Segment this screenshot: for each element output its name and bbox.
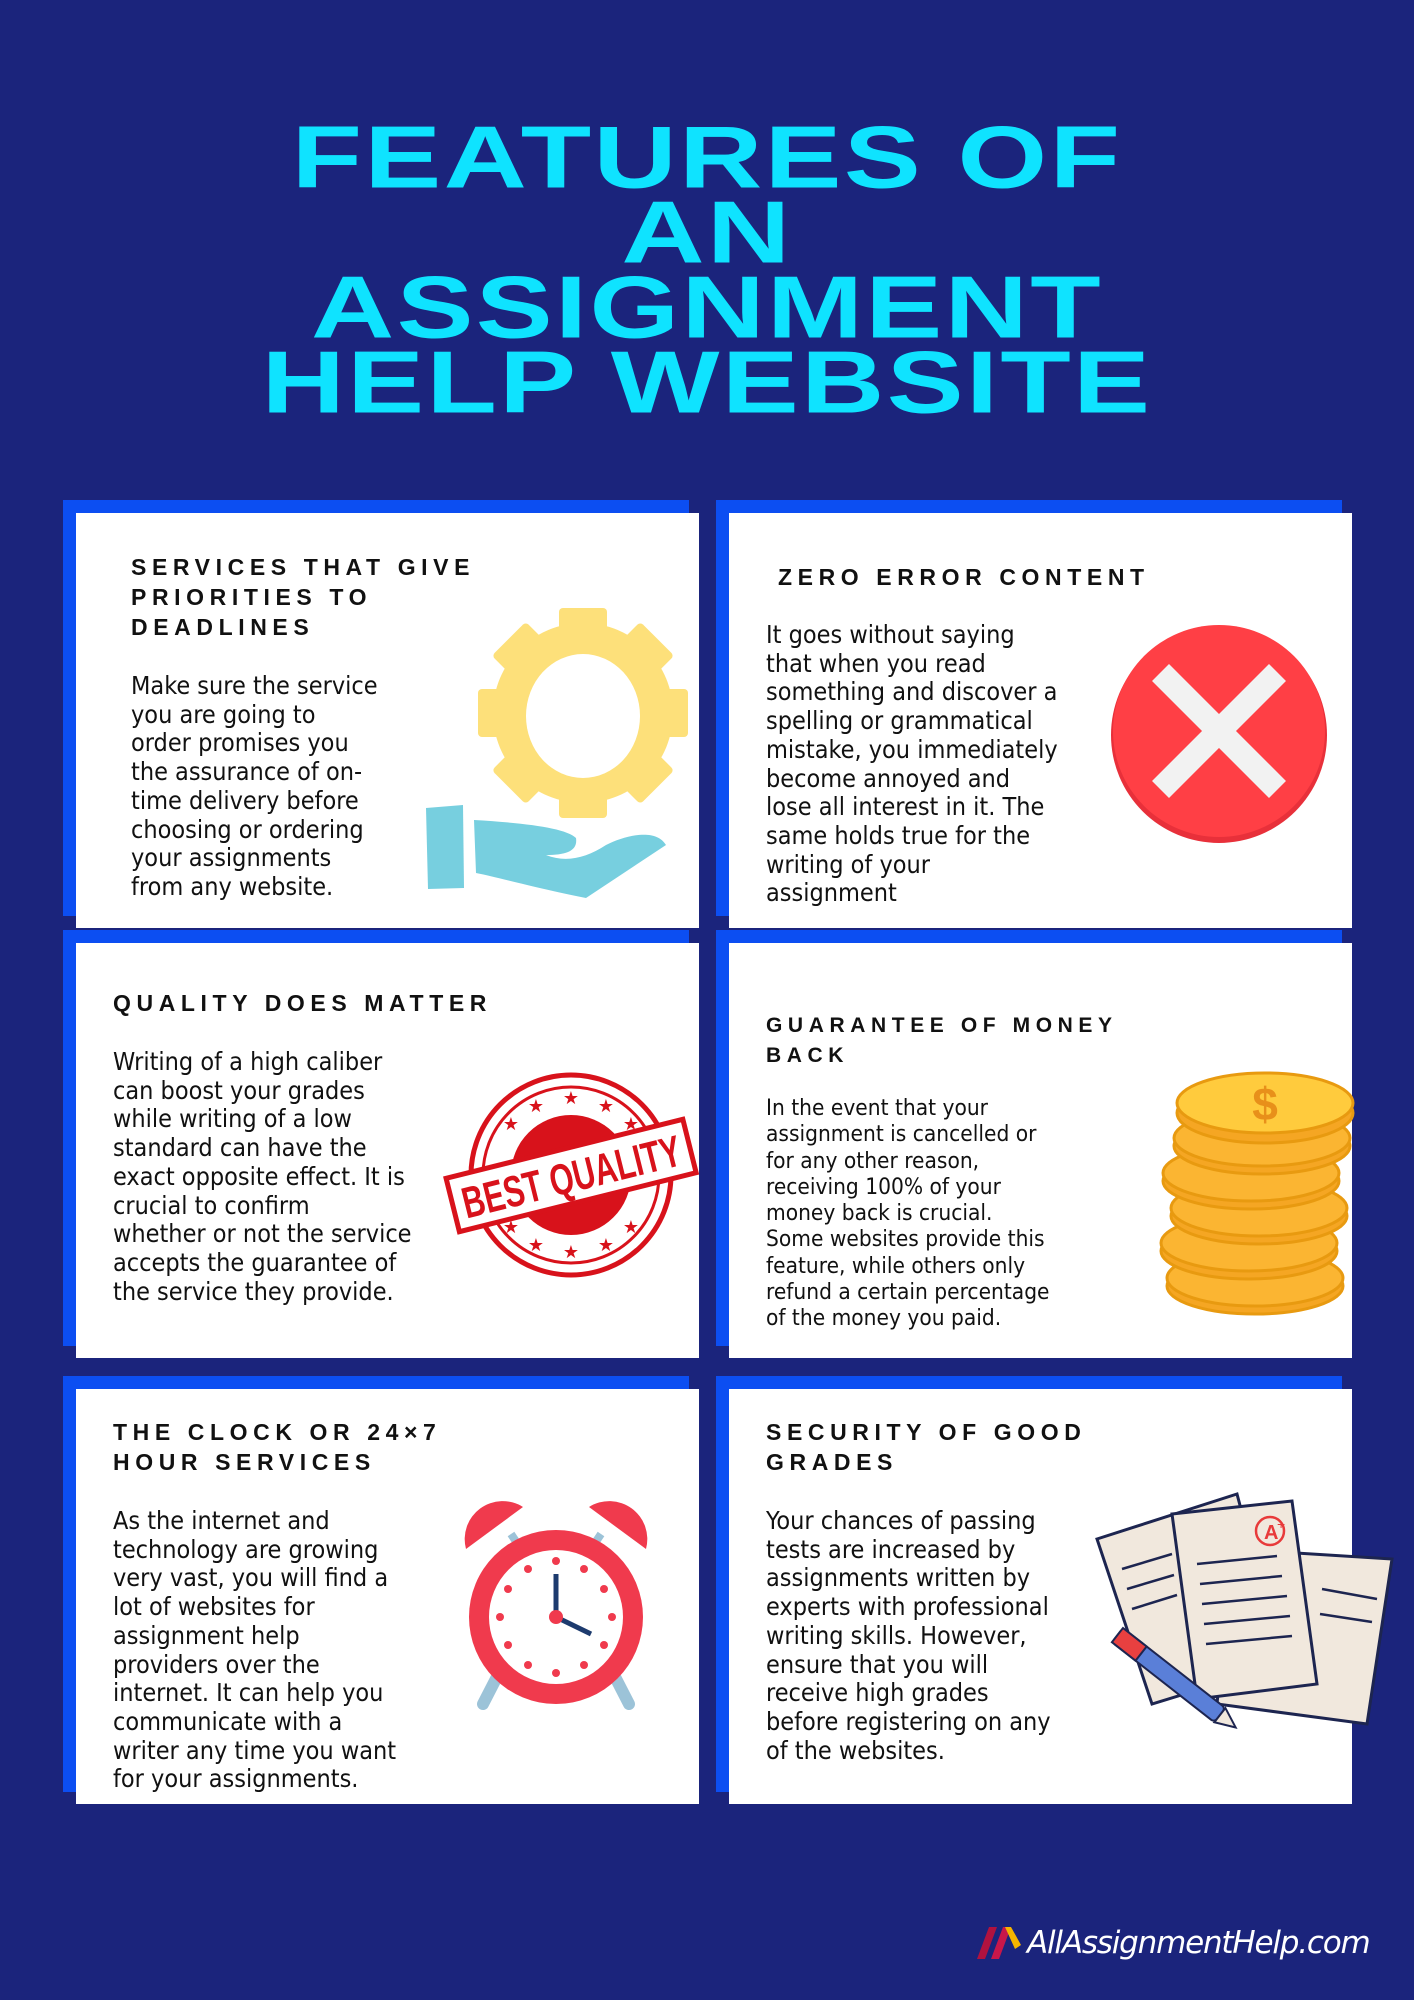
text block: Your chances of passing bbox=[766, 1506, 1036, 1535]
text block: Some websites provide this bbox=[766, 1226, 1045, 1252]
heading bbox=[131, 554, 475, 640]
icon: red x bbox=[1111, 625, 1327, 843]
text block bbox=[766, 620, 1058, 907]
text block: writing skills. However, bbox=[766, 1621, 1027, 1650]
text block: crucial to confirm bbox=[113, 1191, 310, 1220]
icon: best quality stamp: ★ bbox=[503, 1114, 519, 1134]
text block: technology are growing bbox=[113, 1535, 378, 1564]
text block bbox=[113, 1047, 412, 1306]
heading bbox=[113, 1419, 441, 1475]
text block: same holds true for the bbox=[766, 821, 1030, 850]
panel: 24x7 bbox=[76, 1389, 699, 1804]
text block: can boost your grades bbox=[113, 1076, 365, 1105]
title: ASSIGNMENT bbox=[311, 258, 1103, 357]
heading: SERVICES THAT GIVE bbox=[131, 554, 475, 580]
heading: QUALITY DOES MATTER bbox=[113, 990, 492, 1016]
heading: SECURITY OF GOOD bbox=[766, 1419, 1086, 1445]
text block: lot of websites for bbox=[113, 1592, 315, 1621]
heading: GUARANTEE OF MONEY bbox=[766, 1014, 1118, 1037]
text block: In the event that your bbox=[766, 1095, 988, 1121]
heading: BACK bbox=[766, 1044, 849, 1067]
icon: best quality stamp: ★ bbox=[563, 1242, 579, 1262]
text block: your assignments bbox=[131, 843, 331, 872]
text block: become annoyed and bbox=[766, 764, 1010, 793]
text block: of the money you paid. bbox=[766, 1305, 1001, 1331]
text block: mistake, you immediately bbox=[766, 735, 1058, 764]
text block bbox=[131, 671, 378, 901]
text block: exact opposite effect. It is bbox=[113, 1162, 405, 1191]
text block: for any other reason, bbox=[766, 1148, 979, 1174]
heading: PRIORITIES TO bbox=[131, 584, 372, 610]
icon: papers and pen: A bbox=[1264, 1522, 1278, 1544]
text block: tests are increased by bbox=[766, 1535, 1015, 1564]
title: AN bbox=[621, 183, 793, 282]
text block: assignment is cancelled or bbox=[766, 1121, 1036, 1147]
text block bbox=[766, 1506, 1051, 1765]
heading: DEADLINES bbox=[131, 614, 314, 640]
text block: the service they provide. bbox=[113, 1277, 394, 1306]
heading bbox=[766, 1419, 1086, 1475]
text block: communicate with a bbox=[113, 1707, 342, 1736]
icon: logo mark bbox=[977, 1927, 1021, 1959]
icon: gear in hand bbox=[426, 608, 688, 898]
title bbox=[262, 108, 1152, 432]
text block: ensure that you will bbox=[766, 1650, 988, 1679]
text block: you are going to bbox=[131, 700, 315, 729]
text block: something and discover a bbox=[766, 677, 1057, 706]
icon: best quality stamp: ★ bbox=[623, 1217, 639, 1237]
heading: ZERO ERROR CONTENT bbox=[778, 564, 1150, 590]
text block: providers over the bbox=[113, 1650, 320, 1679]
text block: the assurance of on- bbox=[131, 757, 362, 786]
panel: quality bbox=[76, 943, 699, 1358]
text block: feature, while others only bbox=[766, 1253, 1025, 1279]
icon: best quality stamp: ★ bbox=[528, 1096, 544, 1116]
text block bbox=[113, 1506, 396, 1793]
text block: time delivery before bbox=[131, 786, 359, 815]
panel: good grades bbox=[729, 1389, 1352, 1804]
text block: writing of your bbox=[766, 850, 930, 879]
icon: best quality stamp: ★ bbox=[563, 1088, 579, 1108]
title: HELP WEBSITE bbox=[262, 333, 1152, 432]
title: FEATURES OF bbox=[292, 108, 1122, 207]
heading bbox=[766, 1014, 1118, 1067]
icon: papers and pen bbox=[1095, 1492, 1394, 1729]
icon: best quality stamp: ★ bbox=[503, 1217, 519, 1237]
icon: papers and pen: + bbox=[1277, 1516, 1285, 1532]
text block: for your assignments. bbox=[113, 1764, 358, 1793]
panel: zero error bbox=[729, 513, 1352, 928]
text block: Writing of a high caliber bbox=[113, 1047, 382, 1076]
text block: receiving 100% of your bbox=[766, 1174, 1001, 1200]
icon: coin stack: $ bbox=[1252, 1078, 1278, 1130]
text block: internet. It can help you bbox=[113, 1678, 383, 1707]
text block: refund a certain percentage bbox=[766, 1279, 1050, 1305]
text block: that when you read bbox=[766, 649, 986, 678]
icon: best quality stamp bbox=[443, 1072, 700, 1278]
text block: from any website. bbox=[131, 872, 333, 901]
panel: money back bbox=[729, 943, 1352, 1358]
text block: assignment bbox=[766, 878, 897, 907]
text block: assignments written by bbox=[766, 1563, 1030, 1592]
logo bbox=[977, 1925, 1370, 1961]
icon: best quality stamp: ★ bbox=[623, 1114, 639, 1134]
heading: GRADES bbox=[766, 1449, 898, 1475]
text block: before registering on any bbox=[766, 1707, 1051, 1736]
icon: best quality stamp: ★ bbox=[528, 1235, 544, 1255]
text block: standard can have the bbox=[113, 1133, 367, 1162]
icon: alarm clock bbox=[464, 1501, 648, 1710]
text block: very vast, you will find a bbox=[113, 1563, 388, 1592]
text block: assignment help bbox=[113, 1621, 300, 1650]
heading: HOUR SERVICES bbox=[113, 1449, 376, 1475]
text block: experts with professional bbox=[766, 1592, 1049, 1621]
text block: receive high grades bbox=[766, 1678, 989, 1707]
icon: best quality stamp: ★ bbox=[598, 1096, 614, 1116]
text block: It goes without saying bbox=[766, 620, 1015, 649]
logo text: AllAssignmentHelp.com bbox=[1027, 1925, 1370, 1961]
text block: lose all interest in it. The bbox=[766, 792, 1044, 821]
text block: As the internet and bbox=[113, 1506, 330, 1535]
text block: spelling or grammatical bbox=[766, 706, 1033, 735]
text block: whether or not the service bbox=[113, 1219, 412, 1248]
icon: coin stack bbox=[1160, 1072, 1354, 1316]
text block: of the websites. bbox=[766, 1736, 945, 1765]
text block: while writing of a low bbox=[113, 1104, 352, 1133]
text block: order promises you bbox=[131, 728, 349, 757]
icon: best quality stamp: ★ bbox=[598, 1235, 614, 1255]
text block bbox=[766, 1095, 1050, 1331]
text block: Make sure the service bbox=[131, 671, 378, 700]
text block: money back is crucial. bbox=[766, 1200, 992, 1226]
heading: THE CLOCK OR 24×7 bbox=[113, 1419, 441, 1445]
text block: choosing or ordering bbox=[131, 815, 364, 844]
text block: writer any time you want bbox=[113, 1736, 396, 1765]
panel: deadlines bbox=[76, 513, 699, 928]
text block: accepts the guarantee of bbox=[113, 1248, 396, 1277]
